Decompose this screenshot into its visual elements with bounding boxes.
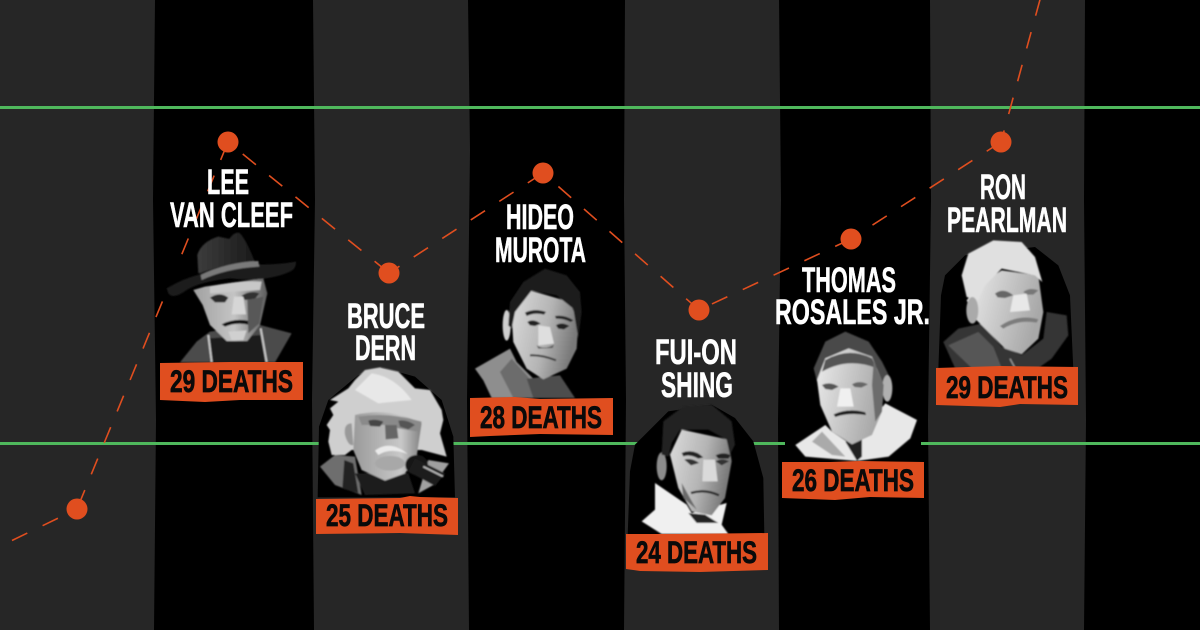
name: ROSALES JR. (775, 293, 930, 332)
actor: Lee Van Cleef: 29 DEATHS (170, 363, 293, 399)
name (947, 168, 1067, 240)
actor: Ron Pearlman: 29 DEATHS (946, 369, 1068, 405)
name: THOMAS (802, 261, 896, 300)
backing shape (938, 247, 1073, 369)
deaths label (936, 366, 1078, 407)
name (495, 198, 586, 270)
actor: Fui-On Shing: 24 DEATHS (636, 534, 757, 570)
data points (66, 132, 1012, 520)
name: DERN (355, 329, 416, 368)
actor: Thomas Rosales Jr. (775, 261, 930, 500)
backing shape (163, 262, 200, 300)
actor: Bruce Dern (316, 297, 458, 535)
name: MUROTA (495, 231, 586, 270)
name: VAN CLEEF (170, 196, 293, 235)
deaths label (316, 496, 458, 535)
actor: Lee Van Cleef (160, 163, 303, 402)
actor: Fui-On Shing (626, 333, 768, 572)
name (775, 261, 930, 332)
portrait (642, 405, 735, 534)
actor: Hideo Murota: 28 DEATHS (480, 399, 602, 435)
name: PEARLMAN (947, 201, 1067, 240)
name: LEE (207, 163, 249, 202)
green gridlines (0, 106, 1200, 445)
name: RON (980, 168, 1026, 207)
portrait (475, 269, 582, 398)
dashed trend line (12, 0, 1041, 540)
name (347, 297, 425, 368)
backing shape (785, 400, 921, 461)
backing shape (318, 367, 455, 497)
backing shape (628, 405, 764, 535)
name: HIDEO (506, 198, 574, 237)
actor: Ron Pearlman (936, 168, 1078, 407)
name (655, 333, 737, 405)
actor: Hideo Murota (470, 198, 613, 437)
deaths label (782, 461, 924, 500)
actor: Thomas Rosales Jr.: 26 DEATHS (792, 462, 914, 498)
portrait (943, 240, 1068, 368)
name: SHING (661, 366, 733, 405)
name: FUI-ON (655, 333, 737, 372)
portrait (167, 233, 296, 362)
deaths label (470, 397, 613, 437)
deaths label (626, 533, 768, 572)
portrait (320, 367, 449, 495)
name (170, 163, 293, 235)
actor: Bruce Dern: 25 DEATHS (326, 497, 448, 533)
deaths label (160, 362, 303, 402)
portrait (795, 332, 917, 461)
name: BRUCE (347, 297, 425, 336)
